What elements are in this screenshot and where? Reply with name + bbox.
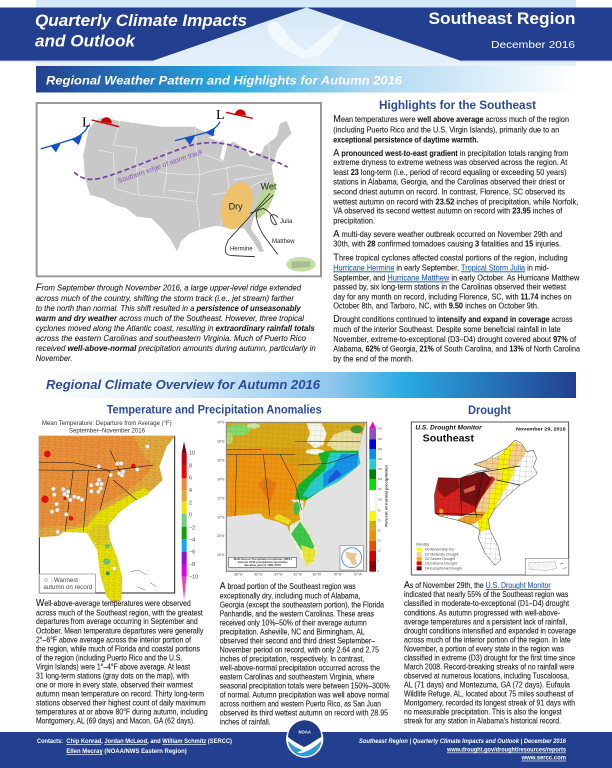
text block: drought: [404, 579, 576, 725]
text block: highlights: A pronounced west-to-east gradient in precipitation totals ranging from: [333, 147, 568, 159]
text block: temperature: [36, 597, 208, 725]
section bar: regional weather pattern: [36, 66, 576, 92]
precipitation color scale: 0: [378, 569, 380, 573]
western front: L: [82, 116, 91, 131]
text block: temperature: across much of the Southeast region, with the greatest: [36, 607, 203, 617]
text block: precipitation: of normal. Autumn precipitation was well above normal: [220, 689, 389, 699]
precipitation color scale: 5: [378, 558, 380, 562]
precipitation color scale: 90: [378, 508, 381, 512]
precipitation color scale: 400: [378, 437, 383, 441]
text block: drought: November, a portion of every state in the region was: [404, 643, 564, 653]
text block: narrative: across the eastern Carolinas and southeastern Virginia. Much of Puerto Rico: [36, 333, 306, 343]
text block: highlights: A multi-day severe weather outbreak occurred on November 29th and: [333, 228, 563, 240]
text block: precipitation: Panhandle, and the western Carolinas. These areas: [220, 608, 374, 618]
header band: [0, 8, 612, 61]
text block: highlights: day for any month on record, including Florence, SC, with 11.74 inches on: [333, 291, 572, 301]
text block: highlights: Alabama, 62% of Georgia, 21% of South Carolina, and 13% of North Carolina: [333, 343, 580, 353]
storm track label: Southern edge of storm track: [117, 149, 204, 185]
map axes: 86°W: [254, 573, 263, 577]
chart title: temperature map: [42, 419, 172, 434]
section bar: regional climate overview: Regional Climate Overview for Autumn 2016: [46, 378, 321, 392]
Puerto Rico oval: [286, 257, 316, 272]
text block: drought: AL (71 days) and Montezuma, GA (72 days). Eufaula: [404, 679, 570, 689]
western front: [41, 116, 119, 152]
map data label: Multi-Sensor Precipitation Estimates (MPE): [234, 557, 292, 561]
precipitation color scale: 130: [378, 477, 383, 481]
chart: drought monitor map: [411, 422, 569, 575]
legend: warmest autumn: autumn on record: [43, 585, 92, 591]
publication info: Southeast Region | Quarterly Climate Impacts and Outlook | December 2016: [359, 738, 566, 745]
precipitation color scale: [369, 422, 388, 573]
text block: highlights: least 23 long-term (i.e., period of record equaling or exceeding 50 years): [333, 167, 567, 177]
precipitation color scale: 500: [378, 426, 383, 430]
text block: highlights: November, extreme-to-exceptional (D3–D4) drought covered about 97% of: [333, 334, 577, 344]
map axes: 84°W: [274, 573, 283, 577]
storm tracks: [225, 193, 278, 257]
text block: drought: March 2008. Record-breaking streaks of no rainfall were: [404, 661, 575, 671]
footer: [0, 732, 612, 768]
text block: temperature: Virgin Islands) were 1°–4°F above average. At least: [36, 661, 191, 671]
text block: highlights: 30th, with 28 confirmed tornadoes causing 3 fatalities and 15 injuries.: [333, 238, 561, 248]
contacts: [37, 738, 232, 755]
text block: precipitation: A broad portion of the Southeast region was: [220, 580, 356, 592]
region and date: [428, 9, 576, 51]
publication info: www.sercc.com: [521, 755, 566, 762]
title: [35, 11, 247, 50]
drought legend: D4 Exceptional Drought: [425, 567, 462, 571]
text block: drought: streak for any station in Alabama's historical record.: [404, 715, 561, 725]
drought monitor titles: November 29, 2016: [516, 426, 566, 432]
map data label: Autumn 2016 precipitation anomalies: [238, 560, 288, 564]
drought monitor titles: Southeast: [423, 434, 475, 445]
map axes: 82°W: [294, 573, 303, 577]
contacts: Chip Konrad, Jordan McLeod, and William Schmitz (SERCC): [66, 738, 232, 745]
map axes: 36°N: [217, 458, 225, 462]
contacts: Ellen Mecray (NOAA/NWS Eastern Region): [66, 748, 187, 755]
map labels: Dry: [229, 201, 243, 211]
text block: precipitation: Georgia (except the southeastern portion), the Florida: [220, 599, 384, 609]
drought legend: D2 Severe Drought: [425, 557, 455, 561]
map labels: Matthew: [272, 239, 295, 245]
text block: temperature: one or more in every state, observed their warmest: [36, 679, 194, 689]
temperature color scale: −6: [189, 550, 195, 556]
text block: narrative: to the north than normal. This shift resulted in a persistence of unseasonably: [36, 303, 301, 313]
text block: narrative: [36, 282, 316, 363]
icon: NOAA logo: [286, 720, 323, 758]
temperature color scale: 10: [189, 451, 195, 457]
text block: highlights: extreme dryness to extreme wetness was observed across the region. At: [333, 157, 568, 167]
text block: narrative: cyclones moved along the Atlantic coast, resulting in extraordinary rainfall totals: [36, 323, 315, 333]
title: and Outlook: [35, 32, 137, 50]
legend: warmest autumn: [39, 574, 95, 593]
text block: precipitation: inches of rainfall.: [220, 716, 271, 726]
wet oval: [251, 179, 279, 221]
map data label: [229, 557, 297, 567]
precipitation color scale: 10: [378, 548, 381, 552]
map axes: 78°W: [333, 573, 342, 577]
text block: temperature: temperatures at or above 80°F during autumn, including: [36, 706, 208, 716]
Puerto Rico inset: [340, 546, 363, 570]
map axes: 28°N: [217, 534, 225, 538]
temperature color scale: −8: [189, 562, 195, 568]
precipitation color scale: 110: [378, 487, 382, 491]
region and date: Southeast Region: [428, 9, 576, 28]
map labels: [229, 182, 295, 253]
text block: highlights: wettest autumn on record with 23.52 inches of precipitation, while Norfolk,: [332, 196, 578, 206]
icon: NOAA logo: NOAA: [299, 730, 311, 734]
publication info: www.drought.gov/drought/resources/reports: [446, 746, 566, 754]
panel: weather pattern map: [37, 103, 321, 276]
Caribbean islands: [131, 570, 157, 590]
text block: highlights: stations in Alabama, Georgia, and the Carolinas observed their driest or: [333, 176, 565, 186]
precipitation color scale: 150: [378, 467, 383, 471]
map axes: 76°W: [354, 573, 363, 577]
contacts: Contacts:: [37, 738, 63, 745]
text block: temperature: of the region (including Puerto Rico and the U.S.: [36, 652, 182, 662]
precipitation color scale: 25: [378, 538, 381, 542]
text block: highlights: second driest autumn on record. In contrast, Florence, SC observed its: [333, 186, 565, 196]
text block: temperature: Well-above-average temperatures were observed: [36, 597, 191, 609]
legend: warmest autumn: : Warmest: [51, 578, 78, 584]
chart: precipitation percent of normal map: [217, 420, 388, 577]
text block: highlights: passed by, six long-term stations in the Carolinas observed their wettest: [333, 281, 567, 291]
text block: highlights: October 8th, and Tarboro, NC, with 9.50 inches on October 9th.: [333, 300, 539, 310]
text block: highlights: [332, 113, 580, 363]
text block: temperature: Montgomery, AL (69 days) and Macon, GA (62 days).: [36, 715, 195, 725]
map labels: Hermine: [230, 247, 253, 253]
temperature color scale: 2: [189, 501, 192, 507]
text block: precipitation: across northern and western Puerto Rico, as San Juan: [220, 698, 381, 708]
storm track edge: [74, 143, 288, 179]
text block: precipitation: seasonal precipitation totals were between 150%–300%: [220, 680, 390, 690]
text block: narrative: across much of the country, shifting the storm track (i.e., jet stream) farther: [36, 293, 295, 303]
temperature color scale: 8: [189, 464, 192, 470]
temperature color scale: 4: [189, 488, 192, 494]
temperature color scale: [182, 442, 198, 600]
text block: precipitation: eastern Carolinas and southeastern Virginia, where: [220, 671, 375, 681]
eastern front: [175, 108, 253, 145]
eastern front: L: [216, 108, 225, 123]
header backdrop: [36, 0, 576, 66]
text block: drought: no measurable precipitation. This is also the longest: [404, 706, 562, 716]
text block: highlights: much of the interior Southeast. Despite some beneficial rainfall in late: [333, 324, 561, 334]
text block: highlights: by the end of the month.: [333, 353, 413, 363]
chart: temperature departure map: [39, 436, 198, 606]
text block: drought: Montgomery, recorded its longest streak of 91 days with: [404, 697, 575, 707]
text block: narrative: warm and dry weather across much of the Southeast. However, three tropical: [36, 313, 305, 323]
temperature color scale: −4: [189, 537, 195, 543]
text block: narrative: From September through November 2016, a large upper-level ridge extended: [36, 282, 301, 294]
heading: drought: Drought: [468, 405, 511, 417]
text block: drought: Wildlife Refuge, AL, located about 75 miles southeast of: [404, 688, 574, 698]
precipitation color scale: 100: [378, 498, 383, 502]
precipitation color scale: Percent of normal precipitation: [383, 464, 388, 527]
map axes: 80°W: [313, 573, 322, 577]
text block: highlights: exceptional persistence of daytime warmth.: [333, 134, 478, 144]
drought monitor titles: U.S. Drought Monitor: [415, 426, 482, 432]
dry oval: [215, 178, 258, 233]
text block: drought: drought conditions intensified and expanded in coverage: [404, 625, 576, 635]
text block: precipitation: observed its third wettest autumn on record with 28.95: [220, 707, 388, 717]
text block: precipitation: received only 10%–50% of their average autumn: [220, 617, 367, 627]
text block: narrative: November.: [36, 353, 72, 363]
temperature color scale: 0: [189, 512, 192, 518]
text block: temperature: October. Mean temperature departures were generally: [36, 625, 204, 635]
text block: temperature: 2°–6°F above average across the interior portion of: [36, 635, 192, 645]
text block: drought: classified in moderate-to-exceptional (D1–D4) drought: [404, 598, 570, 608]
drought monitor titles: [415, 426, 566, 445]
drought legend: D0 Abnormally Dry: [425, 548, 454, 552]
text block: precipitation: precipitation. Asheville, NC and Birmingham, AL: [220, 626, 365, 636]
map data label: Baseline period: 1981-2010: [245, 563, 281, 567]
text block: precipitation: observed their second and third driest September–: [220, 635, 375, 645]
text block: drought: As of November 29th, the U.S. Drought Monitor: [404, 579, 551, 591]
drought legend: D1 Moderate Drought: [425, 552, 459, 556]
section bar: regional climate overview: [36, 372, 576, 398]
temperature color scale: 6: [189, 476, 192, 482]
text block: drought: indicated that nearly 55% of the Southeast region was: [404, 589, 568, 599]
text block: drought: across much of the interior portion of the region. In late: [404, 634, 571, 644]
map axes: 40°N: [217, 420, 225, 424]
heading: temperature and precipitation anomalies: Temperature and Precipitation Anomalies: [107, 404, 322, 416]
drought legend: [416, 542, 462, 571]
map labels: Wet: [261, 182, 277, 192]
text block: precipitation: exceptionally dry, including much of Alabama,: [220, 590, 360, 600]
text block: highlights: Three tropical cyclones affected coastal portions of the region, including: [333, 251, 568, 263]
text block: temperature: 31 long-term stations (gray dots on the map), with: [36, 670, 189, 680]
text block: precipitation: [219, 580, 390, 726]
drought legend: Intensity:: [416, 542, 430, 546]
text block: drought: average temperatures and a persistent lack of rainfall,: [404, 616, 567, 626]
chart title: temperature map: September–November 2016: [69, 427, 145, 434]
title: Quarterly Climate Impacts: [35, 11, 247, 30]
icon: bird swoosh: [267, 21, 344, 59]
map axes: 38°N: [217, 440, 225, 444]
map axes: 88°W: [234, 573, 243, 577]
text block: temperature: departures from average occurring in September and: [36, 616, 198, 626]
text block: highlights: (including Puerto Rico and the U.S. Virgin Islands), primarily due to an: [333, 124, 560, 134]
drought legend: D3 Extreme Drought: [425, 562, 457, 566]
temperature color scale: −10: [189, 575, 198, 581]
warmest autumn station dots: [50, 445, 149, 570]
map axes: 26°N: [217, 553, 225, 557]
text block: highlights: Hurricane Hermine in early September, Tropical Storm Julia in mid-: [333, 262, 549, 272]
text block: precipitation: well-above-normal precipitation occurred across the: [219, 662, 380, 672]
text block: highlights: Drought conditions continued to intensify and expand in coverage across: [333, 313, 573, 325]
text block: temperature: the region, while much of Florida and coastal portions: [36, 643, 200, 653]
chart title: temperature map: Mean Temperature: Departure from Average (°F): [42, 419, 172, 427]
map axes: 34°N: [217, 477, 225, 481]
text block: narrative: received well-above-normal precipitation amounts during autumn, particularly in: [36, 343, 316, 353]
precipitation color scale: 50: [378, 528, 381, 532]
US map: [83, 118, 292, 252]
heading: highlights: Highlights for the Southeast: [379, 98, 536, 112]
precipitation color scale: 300: [378, 447, 383, 451]
section bar: regional weather pattern: Regional Weather Pattern and Highlights for Autumn 2016: [46, 73, 402, 87]
text block: highlights: September, and Hurricane Matthew in early October. As Hurricane Matthew: [333, 272, 580, 282]
map axes: 32°N: [217, 496, 225, 500]
text block: drought: observed at numerous locations, including Tuscaloosa,: [404, 670, 569, 680]
precipitation color scale: 200: [378, 457, 383, 461]
Puerto Rico inset: [525, 558, 569, 575]
text block: precipitation: November period on record, with only 2.64 and 2.75: [220, 644, 379, 654]
map labels: Julia: [280, 219, 293, 225]
text block: highlights: Mean temperatures were well above average across much of the region: [333, 113, 569, 125]
text block: temperature: stations observed their highest count of daily maximum: [36, 697, 206, 707]
text block: highlights: precipitation.: [333, 216, 375, 226]
text block: temperature: autumn mean temperature on record. Thirty long-term: [36, 688, 204, 698]
map axes: [217, 420, 363, 577]
text block: drought: classified in extreme (D3) drought for the first time since: [404, 652, 575, 662]
temperature color scale: −2: [189, 525, 195, 531]
region and date: December 2016: [491, 39, 575, 51]
text block: precipitation: inches of precipitation, respectively. In contrast,: [220, 653, 364, 663]
publication info: [359, 738, 566, 762]
text block: drought: conditions. As autumn progressed with well-above-: [404, 607, 560, 617]
text block: highlights: VA observed its second wettest autumn on record with 23.95 inches of: [333, 205, 563, 215]
map axes: 30°N: [217, 515, 225, 519]
precipitation color scale: 75: [378, 518, 381, 522]
